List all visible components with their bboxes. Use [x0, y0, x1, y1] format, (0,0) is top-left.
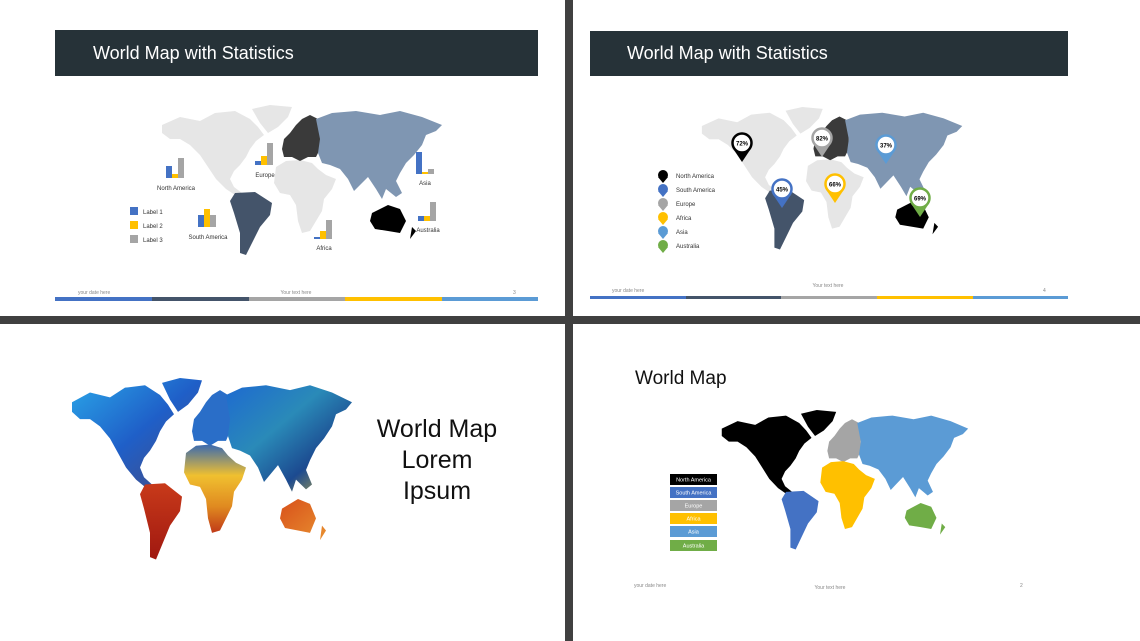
legend 1	[130, 207, 163, 244]
legend 2: Africa	[676, 216, 692, 222]
pin 82%	[812, 128, 832, 157]
footer 2	[590, 283, 1068, 299]
panel: slide 4 colored map	[634, 368, 1023, 591]
legend 4: North America	[676, 478, 712, 484]
chart: Asia: Asia	[419, 181, 431, 187]
map 4	[722, 410, 968, 550]
chart: Australia	[416, 202, 440, 234]
watercolor world map	[72, 378, 352, 560]
legend 1: Label 1	[143, 210, 163, 216]
chart: Australia: Australia	[416, 228, 440, 234]
chart: Europe: Europe	[255, 173, 275, 179]
title text 3: Ipsum	[403, 477, 471, 505]
footer 4: your date here	[634, 583, 666, 589]
pin 66%	[826, 174, 844, 203]
footer 1	[55, 290, 538, 301]
pin 45%	[772, 180, 792, 208]
chart: Africa: Africa	[316, 246, 332, 252]
footer 4: Your text here	[815, 585, 846, 591]
map 1	[162, 105, 442, 255]
legend 2: North America	[676, 174, 715, 180]
chart: North America: North America	[157, 186, 196, 192]
chart: Africa	[314, 220, 332, 252]
footer 4	[634, 583, 1023, 591]
pin 69%	[910, 188, 930, 217]
legend 4: Australia	[683, 544, 705, 550]
footer 1: your date here	[78, 290, 110, 296]
legend 4	[670, 474, 717, 551]
footer 2: 4	[1043, 288, 1046, 294]
pin 45%: 45%	[776, 188, 789, 194]
title text 3: World Map	[377, 415, 497, 443]
footer 1: Your text here	[281, 290, 312, 296]
legend 4: Asia	[688, 530, 700, 536]
legend 1: Label 3	[143, 238, 163, 244]
header bar 1	[55, 30, 538, 76]
pin 37%: 37%	[880, 144, 893, 150]
footer 1: 3	[513, 290, 516, 296]
panel: slide 1 bar statistics	[55, 30, 538, 301]
header bar 1: World Map with Statistics	[93, 43, 294, 63]
title text 3	[377, 415, 497, 505]
legend 4: Africa	[686, 516, 701, 522]
pin 72%: 72%	[736, 142, 749, 148]
chart: Asia	[416, 152, 434, 187]
legend 2	[658, 170, 716, 253]
pin 72%	[732, 134, 752, 162]
map 2	[702, 107, 962, 250]
chart: South America	[188, 209, 228, 241]
chart: North America	[157, 158, 196, 192]
header bar 2	[590, 31, 1068, 76]
panel: slide 2 percentage pins	[590, 31, 1068, 299]
legend 2: Europe	[676, 202, 696, 208]
title text 3: Lorem	[402, 446, 472, 474]
chart: South America: South America	[188, 235, 228, 241]
legend 2: Australia	[676, 244, 700, 250]
panel: slide 3 watercolor map	[72, 378, 497, 560]
legend 4: Europe	[685, 504, 702, 510]
legend 2: Asia	[676, 230, 688, 236]
header bar 2: World Map with Statistics	[627, 43, 828, 63]
legend 2: South America	[676, 188, 716, 194]
pin 37%	[876, 136, 896, 164]
pin 82%: 82%	[816, 136, 829, 142]
legend 4: South America	[676, 490, 712, 496]
chart: Europe	[255, 143, 275, 179]
footer 2: Your text here	[813, 283, 844, 289]
title 4: World Map	[635, 368, 727, 389]
footer 2: your date here	[612, 288, 644, 294]
pin 69%: 69%	[914, 196, 927, 202]
footer 4: 2	[1020, 583, 1023, 589]
legend 1: Label 2	[143, 224, 163, 230]
pin 66%: 66%	[829, 182, 842, 188]
